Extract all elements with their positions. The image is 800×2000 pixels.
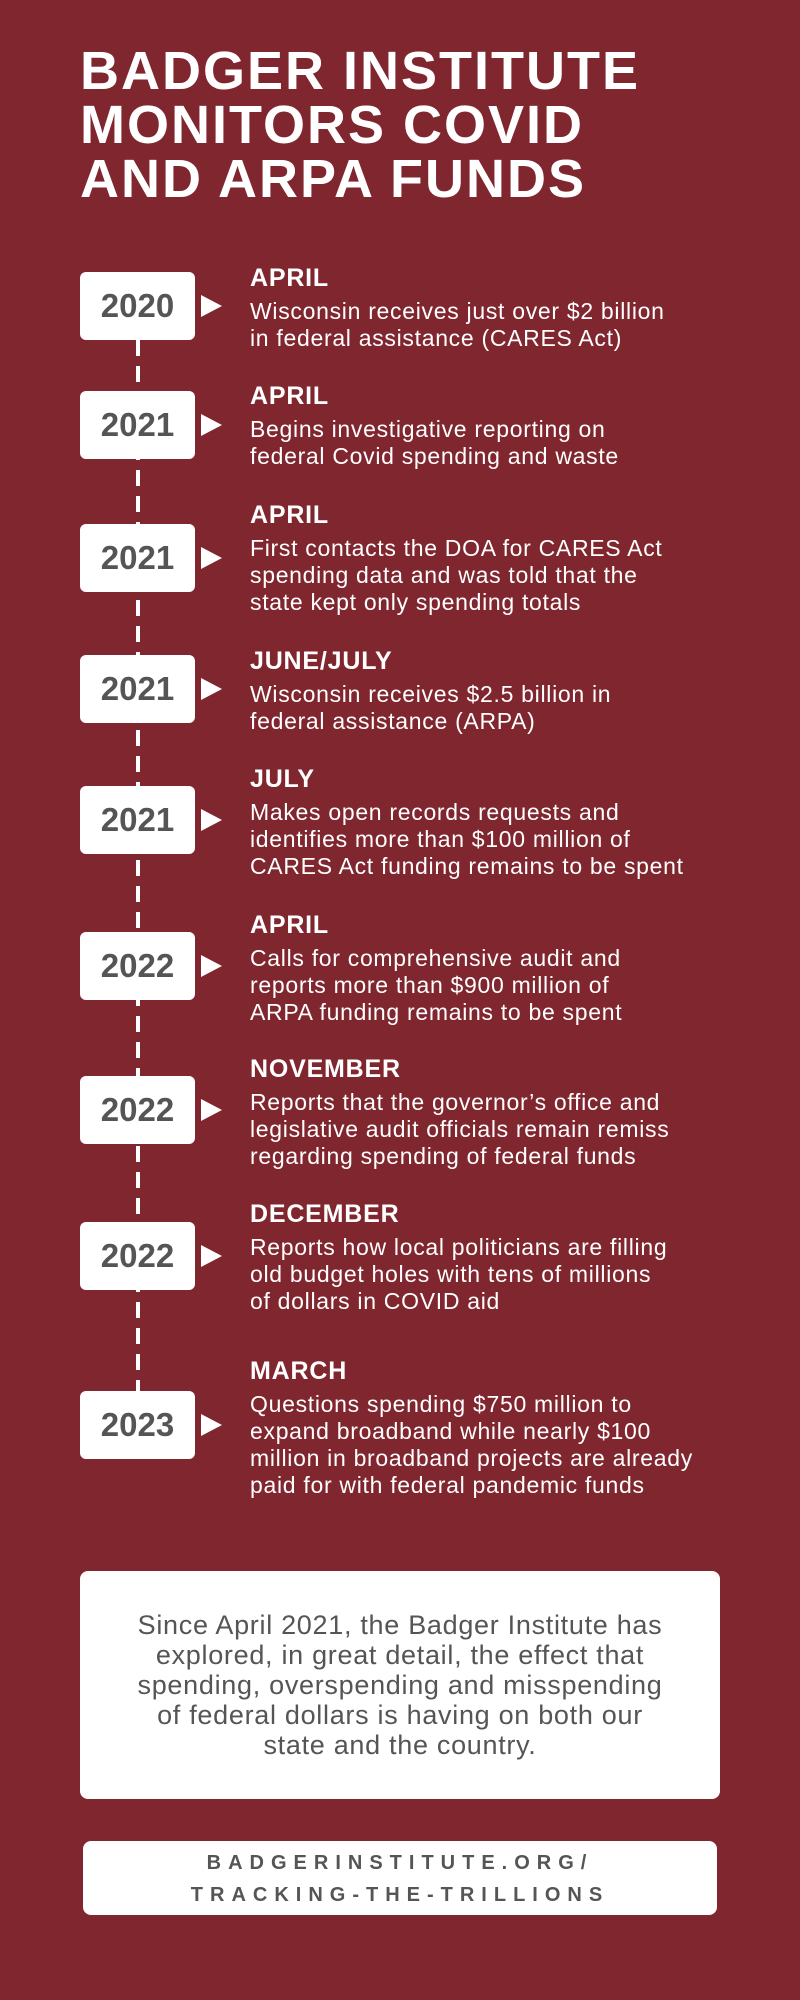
year box 2023: 2023 — [101, 1406, 174, 1443]
year box 2022 — [80, 932, 195, 1000]
arrow — [201, 414, 222, 436]
entry 1: APRIL — [250, 264, 329, 292]
entry 7: NOVEMBER — [250, 1055, 401, 1083]
entry 4: JUNE/JULY — [250, 647, 392, 675]
entry 8: Reports how local politicians are filling — [250, 1234, 667, 1260]
entry 4: Wisconsin receives $2.5 billion in — [250, 681, 611, 707]
entry 5: Makes open records requests and — [250, 799, 619, 825]
entry 2: federal Covid spending and waste — [250, 443, 619, 469]
entry 5: identifies more than $100 million of — [250, 826, 631, 852]
entry 1: in federal assistance (CARES Act) — [250, 325, 622, 351]
arrow — [201, 1099, 222, 1121]
entry 6 — [250, 911, 622, 1025]
entry 9: Questions spending $750 million to — [250, 1391, 632, 1417]
entry 9 — [250, 1357, 693, 1498]
entry 3: APRIL — [250, 501, 329, 529]
entry 5 — [250, 765, 684, 879]
entry 9: MARCH — [250, 1357, 347, 1385]
entry 9: expand broadband while nearly $100 — [250, 1418, 651, 1444]
summary box — [80, 1571, 720, 1799]
arrow — [201, 1245, 222, 1267]
title — [80, 41, 640, 209]
entry 6: reports more than $900 million of — [250, 972, 609, 998]
url box: TRACKING-THE-TRILLIONS — [191, 1884, 609, 1906]
entry 9: million in broadband projects are already — [250, 1445, 693, 1471]
entry 3: First contacts the DOA for CARES Act — [250, 535, 662, 561]
year box 2021 — [80, 786, 195, 854]
year box 2022 — [80, 1222, 195, 1290]
entry 3 — [250, 501, 662, 615]
arrow — [201, 678, 222, 700]
entry 8 — [250, 1200, 667, 1314]
year box 2021 — [80, 391, 195, 459]
year box 2021: 2021 — [101, 406, 174, 443]
entry 8: old budget holes with tens of millions — [250, 1261, 651, 1287]
arrow — [201, 809, 222, 831]
year box 2021: 2021 — [101, 670, 174, 707]
entry 9: paid for with federal pandemic funds — [250, 1472, 645, 1498]
entry 6: ARPA funding remains to be spent — [250, 999, 622, 1025]
summary box: spending, overspending and misspending — [138, 1670, 662, 1700]
entry 3: spending data and was told that the — [250, 562, 638, 588]
entry 1: Wisconsin receives just over $2 billion — [250, 298, 665, 324]
entry 1 — [250, 264, 665, 351]
entry 4 — [250, 647, 611, 734]
year box 2022 — [80, 1076, 195, 1144]
url box — [83, 1841, 717, 1915]
summary box: Since April 2021, the Badger Institute has — [138, 1610, 662, 1640]
entry 7: Reports that the governor’s office and — [250, 1089, 660, 1115]
title: BADGER INSTITUTE — [80, 41, 640, 101]
entry 7 — [250, 1055, 669, 1169]
entry 5: CARES Act funding remains to be spent — [250, 853, 684, 879]
arrow — [201, 955, 222, 977]
entry 7: legislative audit officials remain remiss — [250, 1116, 669, 1142]
url box: BADGERINSTITUTE.ORG/ — [207, 1852, 593, 1874]
year box 2022: 2022 — [101, 947, 174, 984]
entry 6: APRIL — [250, 911, 329, 939]
timeline dashed line — [136, 340, 140, 1392]
year box 2020: 2020 — [101, 287, 174, 324]
arrow — [201, 1414, 222, 1436]
year box 2022: 2022 — [101, 1091, 174, 1128]
entry 7: regarding spending of federal funds — [250, 1143, 636, 1169]
entry 4: federal assistance (ARPA) — [250, 708, 536, 734]
summary box: of federal dollars is having on both our — [157, 1700, 643, 1730]
arrow — [201, 295, 222, 317]
title: MONITORS COVID — [80, 95, 584, 155]
summary box: explored, in great detail, the effect that — [156, 1640, 644, 1670]
year box 2021 — [80, 524, 195, 592]
entry 3: state kept only spending totals — [250, 589, 581, 615]
entry 8: DECEMBER — [250, 1200, 399, 1228]
entry 8: of dollars in COVID aid — [250, 1288, 500, 1314]
entry 2: APRIL — [250, 382, 329, 410]
year box 2022: 2022 — [101, 1237, 174, 1274]
year box 2021 — [80, 655, 195, 723]
entry 6: Calls for comprehensive audit and — [250, 945, 621, 971]
title: AND ARPA FUNDS — [80, 149, 586, 209]
summary box: state and the country. — [263, 1730, 537, 1760]
year box 2023 — [80, 1391, 195, 1459]
entry 2: Begins investigative reporting on — [250, 416, 606, 442]
entry 2 — [250, 382, 619, 469]
year box 2021: 2021 — [101, 539, 174, 576]
year box 2020 — [80, 272, 195, 340]
arrow — [201, 547, 222, 569]
entry 5: JULY — [250, 765, 315, 793]
year box 2021: 2021 — [101, 801, 174, 838]
